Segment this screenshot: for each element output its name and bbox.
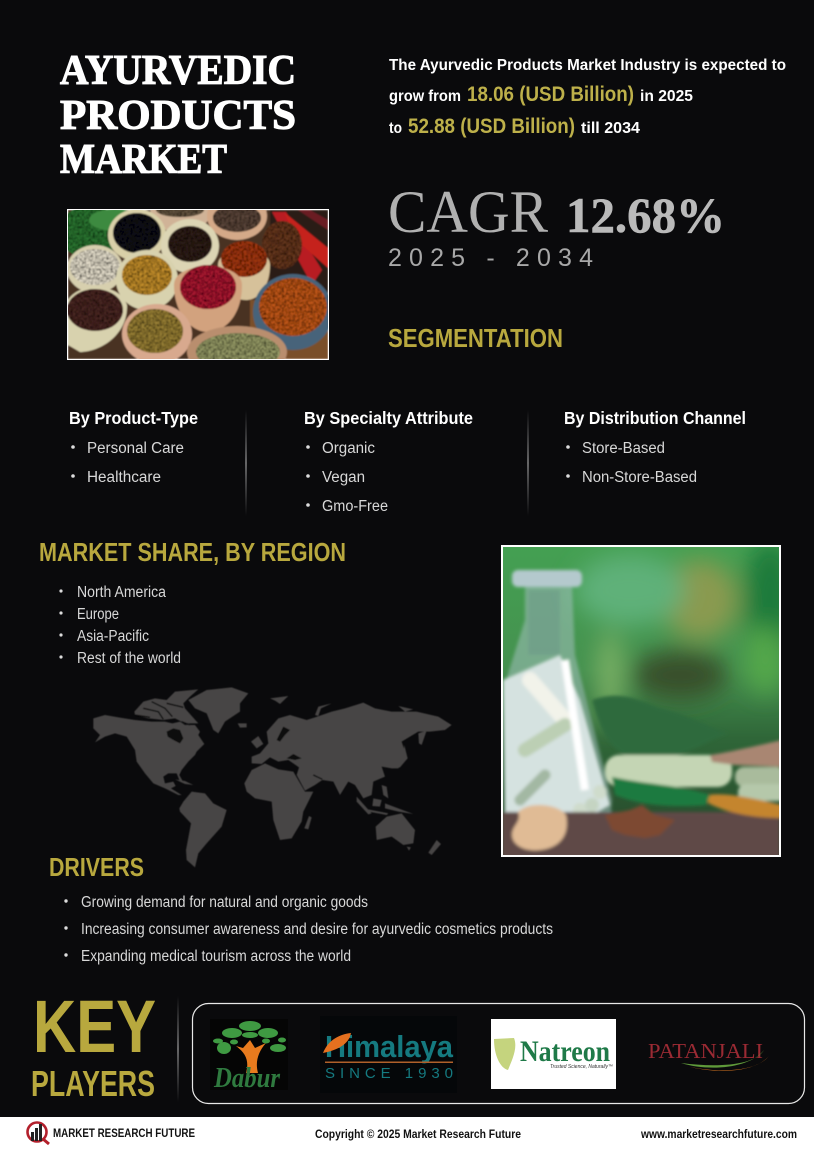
drivers list: Expanding medical tourism across the world (81, 948, 351, 965)
CAGR figure: 2025 - 2034 (388, 244, 593, 272)
segment column: by specialty attribute: Gmo-Free (322, 498, 388, 515)
segment column: by product-type: By Product-Type (69, 408, 198, 428)
title: AYURVEDIC (60, 48, 296, 94)
ginger (512, 805, 567, 850)
logo: Natreon: Natreon (520, 1035, 610, 1068)
panel: key players logos (192, 1004, 804, 1104)
red chilis (262, 210, 328, 300)
segment column: by product-type: Healthcare (87, 469, 161, 486)
dried root (710, 740, 782, 767)
drivers list: Growing demand for natural and organic goods (81, 894, 368, 911)
heading: segmentation: SEGMENTATION (388, 323, 563, 353)
region list: Asia-Pacific (77, 628, 149, 645)
market forecast text: to (389, 120, 402, 137)
bowl brown (67, 287, 127, 352)
segment column: by specialty attribute: By Specialty Attribute (304, 408, 473, 428)
green leaf (612, 777, 710, 806)
bowl top right (207, 210, 268, 242)
flask glass (503, 570, 612, 825)
bowl top centre (150, 210, 208, 231)
segment column: by specialty attribute: Vegan (322, 469, 365, 486)
market forecast text: 52.88 (USD Billion) (408, 115, 575, 138)
market forecast text: grow from (389, 88, 461, 105)
image: capsules in flask (501, 540, 796, 858)
market forecast text: The Ayurvedic Products Market Industry is expected to (389, 57, 786, 74)
leaf (592, 694, 688, 757)
market forecast text (389, 57, 786, 138)
bowl white salt (67, 245, 123, 293)
CAGR figure (388, 179, 725, 272)
key players heading (31, 985, 156, 1104)
bowl blue chilis (253, 274, 333, 350)
segment column: by distribution channel (564, 408, 746, 486)
star anise (605, 805, 675, 838)
image: spices in bowls (67, 209, 329, 360)
CAGR figure: CAGR (388, 179, 548, 245)
key players heading: KEY (33, 985, 156, 1068)
icon: market research future logo (28, 1122, 49, 1144)
region list: Rest of the world (77, 650, 181, 667)
footer: Copyright © 2025 Market Research Future (315, 1127, 521, 1141)
market forecast text: in 2025 (640, 88, 693, 105)
segment column: by product-type: Personal Care (87, 440, 184, 457)
ground (502, 812, 780, 858)
logo: Himalaya (320, 1016, 457, 1093)
logo: Himalaya: SINCE 1930 (325, 1065, 453, 1082)
segment column: by specialty attribute (304, 408, 473, 515)
logo: Dabur (210, 1019, 288, 1094)
title: MARKET (60, 137, 227, 183)
logo: Patanjali (648, 1039, 769, 1071)
logo: Dabur: Dabur (213, 1063, 281, 1094)
CAGR figure: 12.68% (566, 187, 725, 243)
market forecast text: 18.06 (USD Billion) (467, 83, 634, 106)
bowl mixed (122, 304, 192, 364)
bowl cardamom (186, 325, 288, 359)
heading: drivers: DRIVERS (49, 852, 144, 882)
leaves (68, 210, 127, 254)
capsules in flask (503, 655, 610, 825)
market forecast text: till 2034 (581, 120, 640, 137)
bowl black pepper (108, 209, 166, 261)
bowl cloves (161, 219, 219, 273)
segment column: by distribution channel: By Distribution Channel (564, 408, 746, 428)
logo: Natreon: Trusted Science, Naturally™ (550, 1064, 613, 1070)
pale capsules (605, 755, 788, 801)
drivers list: Increasing consumer awareness and desire for ayurvedic cosmetics products (81, 921, 553, 938)
wooden spoon (708, 794, 782, 818)
key players heading: PLAYERS (31, 1063, 155, 1104)
segment column: by distribution channel: Store-Based (582, 440, 665, 457)
title (60, 48, 296, 183)
world map (93, 687, 452, 867)
segment column: by distribution channel: Non-Store-Based (582, 469, 697, 486)
bowl yellow (116, 250, 178, 310)
region list: North America (77, 584, 166, 601)
bowl saffron (218, 241, 270, 300)
logo: Natreon (491, 1019, 616, 1089)
bowl pink pepper (174, 265, 242, 332)
segment column: by specialty attribute: Organic (322, 440, 375, 457)
footer (0, 1117, 814, 1150)
region list: Europe (77, 606, 119, 623)
logo: Patanjali: PATANJALI (648, 1039, 763, 1063)
drivers list (64, 894, 553, 965)
region list (59, 584, 181, 667)
heading: market share by region: MARKET SHARE, BY REGION (39, 537, 346, 567)
title: PRODUCTS (60, 93, 296, 139)
footer: MARKET RESEARCH FUTURE (53, 1126, 195, 1140)
segment column: by product-type (69, 408, 198, 486)
logo: Himalaya: Himalaya (325, 1029, 454, 1064)
